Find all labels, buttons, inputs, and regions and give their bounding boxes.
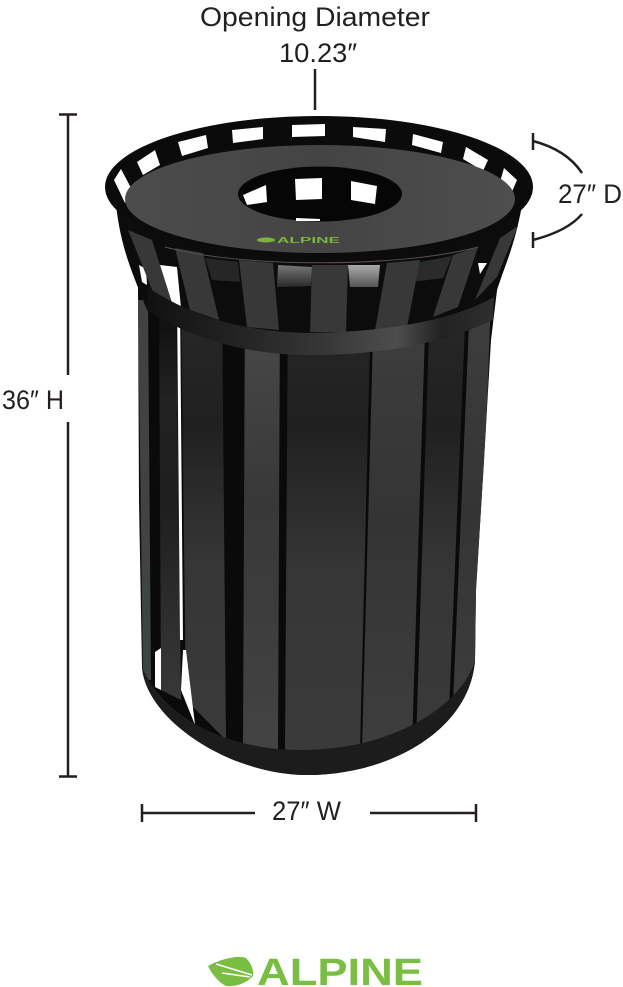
rim: highlight under lip [165,247,478,263]
base ring [142,660,475,775]
lid: small green logo: ALPINE [277,236,341,245]
arrow: opening diameter leader line [314,69,316,110]
dimension: height: 36″ H [2,385,64,415]
rim: outer ring [105,116,533,258]
heading: opening diameter label: Opening Diameter [200,2,430,32]
logo: Alpine [208,952,423,987]
lid: small green logo [257,236,341,245]
dimension: width: 27″ W [272,796,341,826]
dimension: width [142,796,476,826]
dimension: depth [533,133,622,248]
body: dark interior [138,285,497,775]
heading: opening diameter label: 10.23″ [279,38,357,68]
rim: white windows [114,124,517,203]
skirt: reflections between slats [139,256,487,308]
icon: leaf [208,957,253,986]
skirt: flared upper section [116,205,522,345]
body: white gaps between back slats [155,300,195,725]
dimension: depth: 27″ D [558,179,622,209]
lid: opening [238,166,402,222]
heading: opening diameter label [200,2,430,68]
skirt: slanted slats [128,226,518,332]
dimension: height [2,114,77,776]
horizontal band [147,287,494,355]
receptacle illustration [105,116,533,775]
body: vertical slats [138,300,491,750]
lid: flat top [125,145,515,253]
lid: white windows in opening [243,178,377,221]
